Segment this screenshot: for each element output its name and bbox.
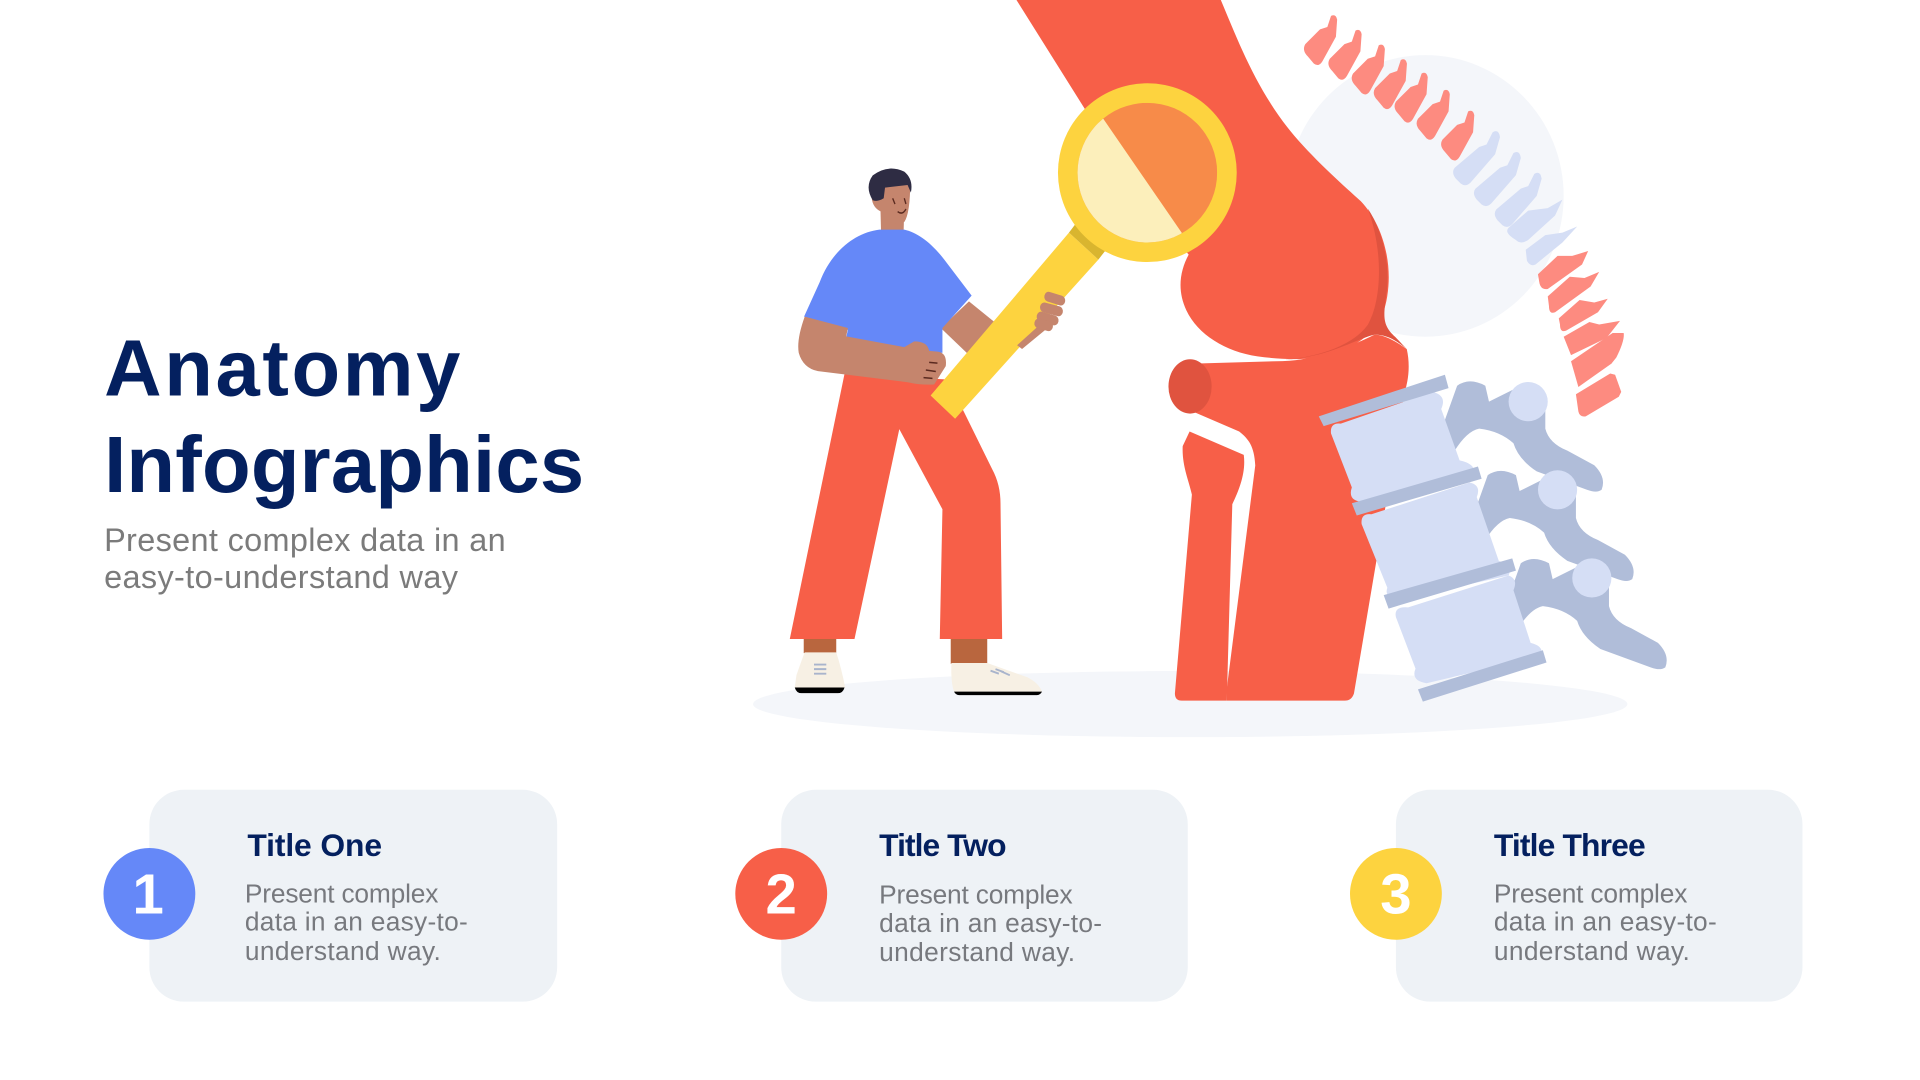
card body: data in an easy-to-: [245, 907, 468, 937]
magnifying glass: [931, 83, 1237, 419]
card body: understand way.: [1494, 936, 1690, 966]
femur: [1016, 0, 1389, 359]
vertebra bodies: [1331, 392, 1542, 683]
subtitle: easy-to-understand way: [104, 559, 459, 595]
number badge 2: [735, 848, 827, 940]
small spine column: [1304, 15, 1624, 417]
lens ring: [1058, 83, 1237, 262]
card body: [245, 878, 468, 966]
card one: [103, 790, 557, 1002]
ground shadow: [753, 671, 1627, 737]
number badge 3: [1350, 848, 1442, 940]
vertebra knobs: [1509, 382, 1611, 598]
card body: understand way.: [879, 937, 1075, 967]
large vertebrae: [1319, 375, 1667, 702]
shins: [804, 637, 987, 664]
handle: [931, 233, 1098, 419]
card body: [1494, 878, 1717, 966]
femur shading: [1285, 209, 1407, 360]
card title: Title One: [247, 827, 382, 863]
near arm and hand: [798, 317, 946, 385]
title: [104, 324, 584, 509]
number badge 2: 2: [766, 862, 797, 925]
card body: understand way.: [245, 936, 441, 966]
tibia: [1189, 335, 1409, 701]
patella: [1168, 359, 1212, 414]
number badge 3: 3: [1380, 862, 1412, 925]
number badge 1: 1: [132, 862, 164, 925]
trousers: [790, 374, 1002, 639]
card body: Present complex: [1494, 878, 1687, 908]
shirt: [804, 230, 972, 353]
holding hand: [1017, 297, 1061, 349]
fibula: [1175, 432, 1244, 701]
title: Infographics: [104, 420, 584, 509]
title: Anatomy: [104, 324, 460, 413]
neck and head: [869, 169, 912, 232]
vertebra plates: [1319, 375, 1547, 702]
far arm: [941, 301, 997, 366]
number badge 1: [103, 848, 195, 940]
shoes: [795, 652, 1042, 695]
background circle behind spine: [1287, 55, 1564, 337]
collar: [1069, 223, 1107, 260]
knee joint bones: [1016, 0, 1409, 701]
card title: Title Three: [1494, 827, 1646, 863]
card background: [781, 790, 1188, 1002]
card background: [149, 790, 557, 1002]
card title: Title Two: [879, 827, 1007, 863]
card body: [879, 880, 1102, 967]
card two: [735, 790, 1188, 1002]
card body: Present complex: [245, 878, 438, 908]
illustration: anatomy scene: [753, 0, 1667, 737]
subtitle: [104, 522, 506, 595]
subtitle: Present complex data in an: [104, 522, 506, 558]
card body: Present complex: [879, 880, 1073, 910]
lens: [1078, 103, 1217, 242]
card body: data in an easy-to-: [879, 908, 1102, 938]
vertebra processes: [1445, 381, 1667, 669]
card background: [1396, 790, 1802, 1002]
person: [790, 169, 1042, 695]
card body: data in an easy-to-: [1494, 907, 1717, 937]
card three: [1350, 790, 1802, 1002]
